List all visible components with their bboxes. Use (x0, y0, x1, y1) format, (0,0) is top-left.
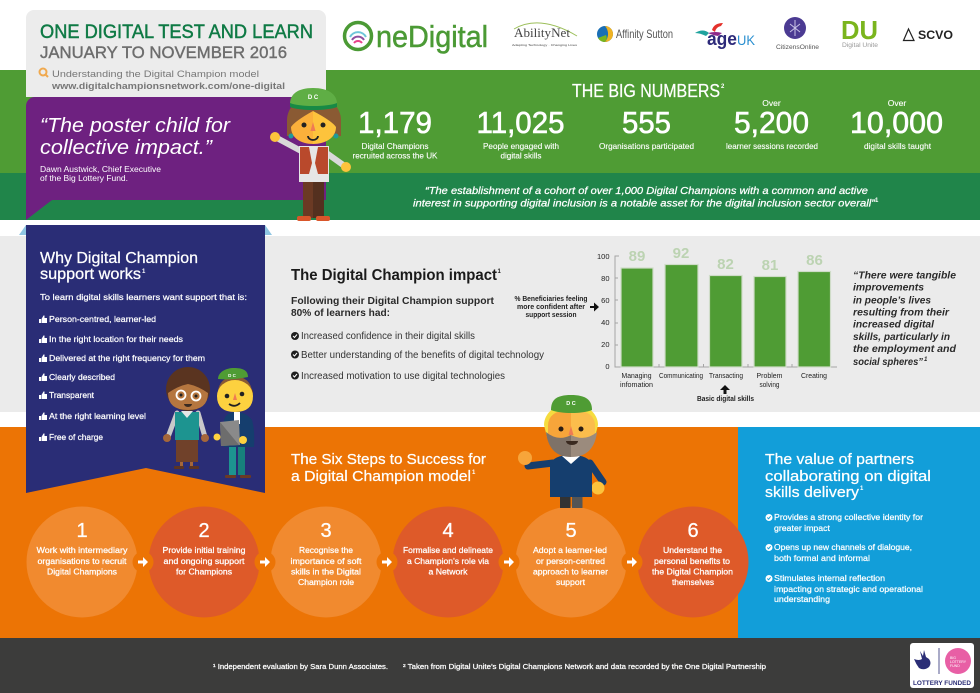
step 1: Digital Champions (47, 566, 117, 576)
heading (291, 451, 486, 485)
chart annotation: y axis: % Beneficiaries feeling (514, 296, 588, 303)
logo: Age UK: UK (737, 32, 756, 48)
stat: learner sessions: Over (762, 98, 781, 108)
bar chart: 0 (605, 362, 610, 371)
bar chart: Managing (622, 373, 652, 380)
stat: learner sessions: 5,200 (734, 105, 809, 140)
logo: lottery funded: BIG (950, 656, 956, 660)
stat: digital skills taught: Over (888, 98, 906, 108)
panel: purple quote (26, 97, 326, 220)
list: what learners want: In the right location for their needs (49, 334, 183, 344)
arrow: step 3 to 4 (376, 552, 398, 572)
stat: people engaged: People engaged with (483, 141, 559, 151)
bar chart: 89 (629, 248, 645, 265)
bar chart: 40 (601, 318, 610, 327)
bar chart: Transacting (709, 373, 743, 380)
quote: tangible improvements (853, 270, 957, 368)
stat: digital champions: recruited across the UK (352, 150, 438, 160)
stat: digital champions: 1,179 (358, 105, 432, 140)
step 6 (638, 506, 748, 618)
logo: Citizens Online (776, 17, 820, 51)
step 6: Understand the (663, 545, 722, 555)
logo: Citizens Online: CitizensOnline (776, 45, 820, 51)
bar chart: 82 (717, 256, 734, 273)
step 1: Work with intermediary (36, 545, 128, 555)
list: what learners want: Delivered at the right frequency for them (49, 353, 205, 363)
bar chart: solving (760, 382, 780, 389)
stat: digital skills taught: digital skills taught (864, 141, 932, 151)
stat: digital champions (352, 105, 438, 160)
logo: lottery funded: LOTTERY FUNDED (913, 680, 971, 687)
step 1 (26, 506, 138, 618)
list: what learners want (39, 314, 205, 442)
quote: tangible improvements: social spheres” (853, 356, 924, 368)
illustration: champion with waving arms (270, 88, 351, 221)
list: outcomes: Increased motivation to use digital technologies (301, 371, 505, 382)
quote: tangible improvements: increased digital (853, 318, 935, 330)
heading: collaborating on digital (765, 468, 931, 485)
intro text: Following their Digital Champion support (291, 295, 494, 307)
heading: the big numbers: 2 (721, 84, 725, 90)
illustration: bearded champion (518, 395, 604, 508)
illustration: woman with glasses (163, 367, 210, 469)
arrow: step 1 to 2 (132, 552, 154, 572)
panel: footer (0, 638, 980, 693)
step 4 (392, 506, 504, 618)
chart annotation: y axis: more confident after (517, 304, 585, 311)
quote: evaluation (413, 185, 879, 210)
step 6: the Digital Champion (652, 566, 733, 576)
step 2: and ongoing support (164, 556, 245, 566)
quote: tangible improvements: skills, particularly in (853, 331, 950, 343)
stat: digital skills taught: 10,000 (850, 105, 943, 140)
quote: evaluation: 1 (875, 198, 879, 204)
list: partner benefits: impacting on strategic and operational (774, 584, 923, 594)
heading: The value of partners (765, 451, 914, 468)
bar chart: Creating (801, 373, 827, 380)
bar chart: 60 (601, 296, 610, 305)
footnotes: ¹ Independent evaluation by Sara Dunn Associates. (213, 662, 388, 671)
chart annotation: y axis (514, 296, 599, 319)
step 3: 3 (320, 520, 332, 542)
heading: 1 (142, 269, 146, 275)
step 5: 5 (565, 520, 577, 542)
heading: the big numbers: THE BIG NUMBERS (572, 81, 720, 101)
step 3: Champion role (298, 577, 354, 587)
attribution (40, 165, 162, 183)
list: partner benefits: greater impact (774, 523, 831, 533)
step 4: 4 (442, 520, 454, 542)
heading: 1 (498, 269, 502, 275)
list: outcomes: Better understanding of the benefits of digital technology (301, 350, 544, 361)
logo: OneDigital: neDigital (376, 19, 488, 54)
panel: value of partners (738, 427, 980, 638)
list: outcomes (291, 331, 544, 382)
arrow: step 4 to 5 (498, 552, 520, 572)
logo: AbilityNet: Adapting Technology · Changing Lives (512, 43, 578, 47)
panel: Digital Champion impact (0, 236, 980, 412)
heading: The Six Steps to Success for (291, 451, 486, 468)
list: what learners want: Clearly described (49, 372, 115, 382)
quote: evaluation: interest in supporting digital inclusion is a notable asset for the digital inclusion sector overall” (413, 198, 876, 210)
logo: Age UK: age (707, 29, 737, 49)
stat: people engaged (476, 105, 564, 160)
logo: Affinity Sutton: Affinity Sutton (616, 27, 673, 41)
list: what learners want: Transparent (49, 390, 95, 400)
panel: big numbers band (0, 70, 980, 220)
step 3 (270, 506, 382, 618)
step 6: personal benefits to (654, 556, 730, 566)
icon: magnifier (40, 68, 48, 77)
step 4: Formalise and delineate (403, 545, 493, 555)
stat: digital champions: Digital Champions (362, 141, 428, 151)
bar chart: 100 (597, 252, 610, 261)
stat: organisations: Organisations participated (599, 141, 694, 151)
logo: Age UK (695, 23, 756, 49)
step 2 (148, 506, 260, 618)
logo: AbilityNet (512, 23, 578, 47)
bar chart: infomation (620, 382, 653, 389)
list: what learners want: At the right learning level (49, 411, 146, 421)
chart annotation: basic digital skills: Basic digital skills (697, 396, 754, 403)
illustration: man with tablet: D C (228, 373, 237, 378)
quote: collective impact.” (40, 137, 213, 159)
heading: Why Digital Champion (40, 250, 198, 267)
step 2: 2 (198, 520, 210, 542)
logo: SCVO: SCVO (918, 30, 953, 42)
list: partner benefits: understanding (774, 594, 830, 604)
list: partner benefits: Stimulates internal reflection (774, 573, 885, 583)
panel: why digital champion support works (19, 225, 272, 493)
link text: Understanding the Digital Champion model (52, 69, 259, 80)
stat: organisations (599, 105, 694, 151)
intro text: To learn digital skills learners want support that is: (40, 292, 247, 302)
step 1: 1 (76, 520, 88, 542)
quote: evaluation: “The establishment of a cohort of over 1,000 Digital Champions with a common and active (425, 185, 868, 197)
cap: D C (566, 401, 576, 407)
chart annotation: basic digital skills (697, 385, 754, 403)
heading: skills delivery (765, 484, 860, 501)
stat: learner sessions (726, 98, 818, 151)
heading: The Digital Champion impact (291, 267, 497, 284)
list: partner benefits: both formal and informal (774, 553, 870, 563)
logo: AbilityNet: AbilityNet (514, 26, 571, 40)
stat: people engaged: 11,025 (476, 105, 564, 140)
panel: six steps (0, 427, 748, 638)
link text: www.digitalchampionsnetwork.com/one-digital (51, 81, 285, 92)
logo: Digital Unite: Digital Unite (842, 43, 879, 49)
quote: tangible improvements: “There were tangible (853, 270, 956, 282)
heading: a Digital Champion model (291, 468, 471, 485)
illustration: man with tablet (214, 368, 254, 478)
intro text (291, 295, 494, 319)
heading: 1 (472, 470, 476, 476)
quote (40, 115, 231, 159)
list: what learners want: Free of charge (49, 432, 103, 442)
step 6: 6 (687, 520, 699, 542)
bar chart: Communicating (659, 373, 703, 380)
step 5: Adopt a learner-led (533, 545, 607, 555)
quote: tangible improvements: in people’s lives (853, 294, 931, 306)
step 4: a Network (428, 566, 468, 576)
bar chart (597, 245, 837, 389)
quote: tangible improvements: the employment and (853, 343, 957, 355)
heading (765, 451, 931, 501)
step 6: themselves (672, 577, 714, 587)
step 4: a Champion’s role via (407, 556, 489, 566)
cap: D C (308, 95, 319, 101)
bar chart: 86 (806, 252, 823, 269)
heading: 1 (860, 486, 864, 492)
quote: tangible improvements: 1 (924, 357, 928, 363)
bar chart: 81 (762, 257, 778, 274)
logo: Affinity Sutton (597, 26, 673, 42)
step 3: importance of soft (290, 556, 362, 566)
quote: tangible improvements: improvements (853, 282, 924, 294)
link text (51, 69, 285, 92)
title: ONE DIGITAL TEST AND LEARN (40, 22, 313, 43)
logo: lottery funded: LOTTERY (950, 660, 967, 664)
chart annotation: y axis: support session (526, 312, 576, 319)
list: partner benefits: Provides a strong collective identity for (774, 512, 923, 522)
subtitle: JANUARY TO NOVEMBER 2016 (40, 43, 287, 62)
arrow: step 5 to 6 (622, 552, 642, 572)
panel: title block (26, 10, 326, 97)
step 2: Provide initial training (162, 545, 246, 555)
list: partner benefits: Opens up new channels of dialogue, (774, 542, 912, 552)
step 5: approach to learner (533, 566, 608, 576)
logo: lottery funded: FUND (950, 664, 960, 668)
quote: tangible improvements: resulting from their (853, 306, 950, 318)
stat: learner sessions: learner sessions recorded (726, 141, 818, 151)
step 1: organisations to recruit (38, 556, 127, 566)
footnotes: ² Taken from Digital Unite’s Digital Champions Network and data recorded by the One Digital Partnership (403, 662, 766, 671)
quote: “The poster child for (40, 115, 231, 137)
heading (40, 250, 198, 283)
step 3: Recognise the (299, 545, 353, 555)
attribution: of the Big Lottery Fund. (40, 174, 128, 183)
bar chart: 80 (601, 274, 610, 283)
logo: Digital Unite: DU (841, 15, 878, 45)
step 5: or person-centred (536, 556, 605, 566)
footnotes (213, 662, 766, 671)
step 3: skills in the Digital (291, 566, 361, 576)
bar chart: 92 (673, 245, 689, 262)
stat: organisations: 555 (622, 105, 671, 140)
logo: SCVO (904, 29, 953, 42)
stat: people engaged: digital skills (500, 150, 542, 160)
bar chart: Problem (756, 373, 783, 380)
logo: lottery funded (910, 643, 974, 688)
arrow: step 2 to 3 (254, 552, 276, 572)
step 5: support (556, 577, 586, 587)
list: partner benefits (766, 512, 923, 604)
step 5 (516, 506, 626, 618)
bar chart: 20 (601, 340, 610, 349)
stat: digital skills taught (850, 98, 943, 151)
list: outcomes: Increased confidence in their digital skills (301, 331, 475, 342)
list: what learners want: Person-centred, learner-led (49, 314, 156, 324)
attribution: Dawn Austwick, Chief Executive (40, 165, 162, 174)
heading: support works (40, 266, 141, 283)
intro text: 80% of learners had: (291, 307, 390, 319)
step 2: for Champions (176, 566, 232, 576)
